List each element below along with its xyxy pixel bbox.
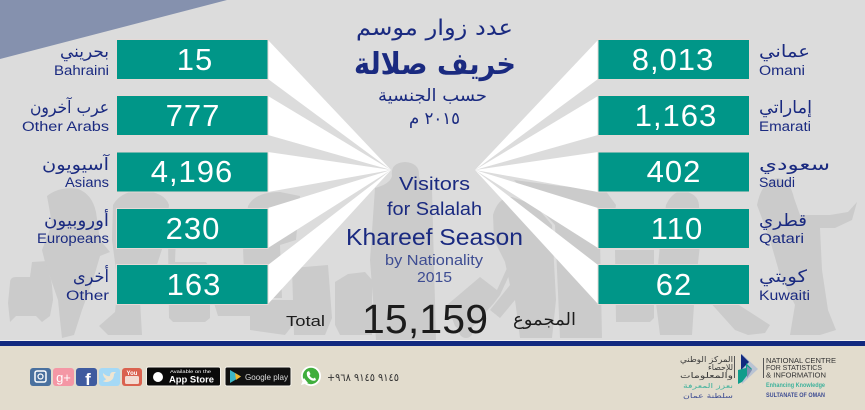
English title: 2015: [417, 269, 452, 286]
English title: Khareef Season: [346, 224, 523, 250]
logo: English centre name: FOR STATISTICS: [766, 363, 822, 372]
right row: Qatari: [598, 208, 807, 248]
left row: Europeans: [37, 208, 268, 248]
Arabic title: [354, 16, 516, 129]
right row: Emarati: [598, 96, 812, 136]
right row: Qatari: 110: [651, 211, 703, 246]
badge: Google play: [225, 367, 291, 386]
right row: Emarati: Emarati: [759, 119, 811, 134]
English title: by Nationality: [385, 252, 484, 269]
left row: Other: 163: [167, 267, 221, 302]
logo: mark: [734, 354, 758, 384]
left rays: [268, 40, 391, 304]
Arabic title: عدد زوار موسم: [356, 16, 513, 41]
total: Total: [286, 313, 325, 330]
right row: Saudi: 402: [647, 154, 701, 189]
logo: English centre name: NATIONAL CENTRE: [766, 356, 836, 365]
logo: English centre name: Enhancing Knowledge: [766, 382, 825, 389]
logo: Arabic centre name: نعزز المعرفة: [683, 382, 733, 390]
left row: Bahraini: Bahraini: [54, 63, 109, 78]
Arabic title: حسب الجنسية: [378, 86, 487, 106]
badge: Google play: Google play: [245, 372, 289, 382]
left row: Bahraini: 15: [177, 42, 213, 77]
left row: Europeans: Europeans: [37, 231, 109, 246]
icon: whatsapp: [301, 366, 321, 386]
left row: Other Arabs: 777: [166, 98, 220, 133]
left row: Other Arabs: عرب آخرون: [30, 96, 109, 118]
left row: Other Arabs: Other Arabs: [22, 119, 109, 134]
English title: for Salalah: [387, 199, 482, 219]
right row: Emarati: 1,163: [635, 98, 717, 133]
right rays: [475, 40, 598, 304]
right row: Kuwaiti: كويتي: [759, 267, 808, 287]
icon: facebook: f: [85, 370, 91, 389]
left row: Other: أخرى: [73, 265, 109, 287]
right row: Omani: Omani: [759, 63, 805, 78]
right row: Saudi: Saudi: [759, 175, 795, 190]
logo: English centre name: SULTANATE OF OMAN: [766, 393, 825, 399]
logo: Arabic centre name: والمعلومات: [680, 371, 733, 380]
logo: Arabic centre name: المركز الوطني: [680, 355, 733, 364]
logo: English centre name: [763, 356, 836, 399]
total: 15,159: [362, 296, 488, 342]
English title: [346, 174, 523, 286]
right row: Saudi: [598, 152, 830, 192]
icon: google plus: [53, 368, 74, 386]
badge: App Store: Available on the: [170, 369, 212, 374]
left row: Asians: [42, 152, 268, 192]
right row: Qatari: Qatari: [759, 231, 804, 246]
Arabic title: خريف صلالة: [354, 47, 516, 82]
right row: Kuwaiti: 62: [656, 267, 692, 302]
phone number: +٩٦٨ ٩١٤٥ ٩١٤٥: [327, 372, 399, 384]
left row: Europeans: 230: [166, 211, 220, 246]
right row: Saudi: سعودي: [759, 155, 830, 175]
right row: Omani: عماني: [759, 42, 810, 62]
left row: Bahraini: [54, 40, 268, 80]
left row: Europeans: أوروبيون: [44, 209, 109, 231]
traveller silhouettes: [8, 162, 857, 340]
right row: Qatari: قطري: [759, 211, 807, 231]
icon: twitter: [99, 368, 120, 386]
left row: Other: Other: [66, 288, 110, 303]
right row: Omani: [598, 40, 810, 80]
logo: Arabic centre name: سلطنة عمان: [683, 392, 733, 400]
badge: App Store: [146, 367, 220, 386]
left row: Asians: Asians: [65, 175, 109, 190]
left row: Bahraini: بحريني: [60, 42, 109, 62]
footer band: [0, 340, 865, 410]
icon: facebook: [76, 368, 97, 389]
logo: Arabic centre name: [680, 355, 733, 400]
logo: English centre name: & INFORMATION: [766, 370, 826, 380]
logo: Arabic centre name: للإحصاء: [708, 363, 733, 373]
left row: Asians: 4,196: [151, 154, 233, 189]
badge: App Store: App Store: [169, 374, 214, 386]
right row: Omani: 8,013: [632, 42, 714, 77]
left row: Other: [66, 264, 268, 304]
icon: google plus: g+: [56, 370, 71, 385]
total: المجموع: [513, 310, 576, 330]
left row: Other Arabs: [22, 96, 268, 136]
left row: Asians: آسيويون: [42, 153, 110, 175]
icon: youtube: [122, 368, 142, 386]
right row: Emarati: إماراتي: [759, 98, 812, 118]
icon: instagram: [30, 368, 51, 386]
right row: Kuwaiti: Kuwaiti: [759, 288, 810, 303]
icon: youtube: You: [127, 371, 138, 377]
right row: Kuwaiti: [598, 264, 810, 304]
Arabic title: ٢٠١٥ م: [409, 109, 460, 129]
English title: Visitors: [399, 174, 470, 194]
corner triangle: [0, 0, 227, 59]
total: [286, 296, 576, 342]
